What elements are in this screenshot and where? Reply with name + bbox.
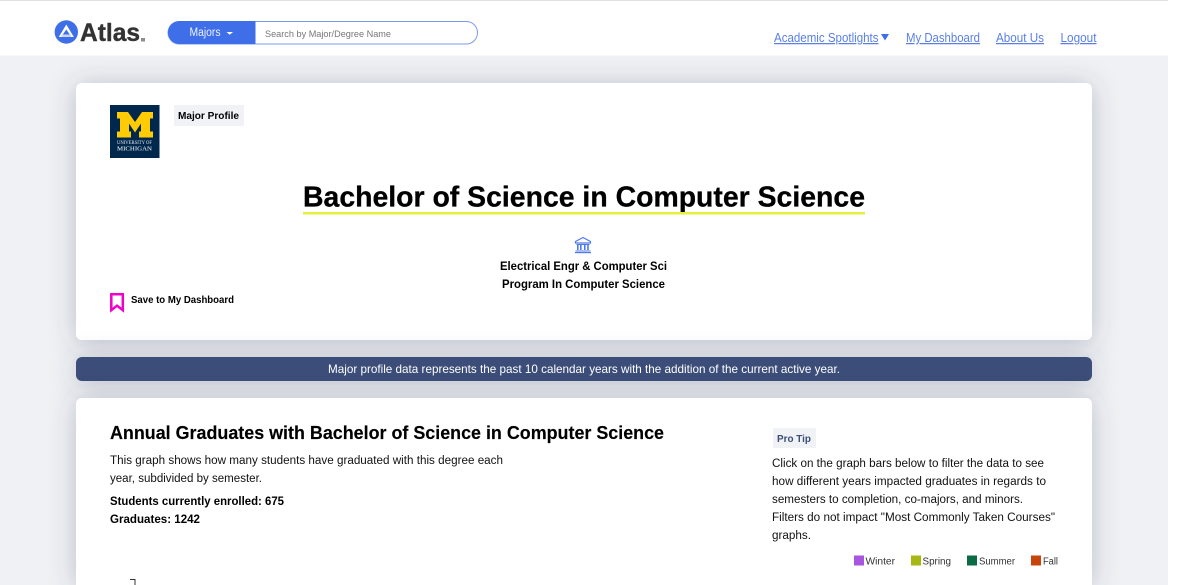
tag: pro tip: Pro Tip: [777, 434, 811, 445]
text: pro tip body: how different years impacted graduates in regards to: [772, 476, 1046, 488]
icon: institution building: [575, 238, 591, 253]
legend: Summer: [979, 556, 1016, 568]
search bar: Majors: [190, 27, 221, 39]
icon: University of Michigan logo: UNIVERSITY OF: [117, 141, 152, 146]
icon: University of Michigan logo: [110, 105, 160, 158]
tag: pro tip: [773, 428, 816, 448]
legend: Spring: [922, 556, 951, 568]
text: pro tip body: graphs.: [772, 530, 811, 542]
heading: Annual Graduates with Bachelor of Science in Computer Science: [110, 422, 664, 443]
text: enrolment statistics: Graduates: 1242: [110, 514, 200, 526]
banner: data note: Major profile data represents the past 10 calendar years with the addition of the current active year.: [328, 362, 840, 376]
text: pro tip body: [772, 458, 1055, 542]
panel: annual graduates card: [76, 398, 1092, 585]
navigation links: My Dashboard: [906, 31, 980, 45]
text: graph description: This graph shows how many students have graduated with this degree each: [110, 455, 503, 467]
navigation links: Logout: [1060, 31, 1097, 45]
banner: data note: [76, 357, 1092, 381]
text: graph description: [110, 455, 503, 485]
navigation bar: [0, 0, 1168, 56]
tag: major profile: [174, 105, 244, 126]
text: department and program: Program In Computer Science: [502, 279, 665, 291]
legend: Fall: [1043, 556, 1058, 568]
navigation links: About Us: [996, 31, 1044, 45]
save to dashboard: Save to My Dashboard: [131, 295, 234, 306]
text: pro tip body: Filters do not impact "Most Commonly Taken Courses": [772, 512, 1055, 524]
text: graph description: year, subdivided by semester.: [110, 473, 262, 485]
chart corner: [130, 580, 135, 585]
navigation links: Academic Spotlights: [774, 31, 878, 45]
navigation links: [774, 31, 1097, 45]
legend: [854, 556, 1058, 568]
search bar: [168, 21, 478, 44]
search bar: Search by Major/Degree Name: [265, 29, 391, 40]
legend: Winter: [866, 556, 896, 568]
wordmark: Atlas: [80, 19, 140, 47]
text: department and program: [500, 261, 667, 291]
text: pro tip body: Click on the graph bars below to filter the data to see: [772, 458, 1044, 470]
tag: major profile: Major Profile: [178, 110, 239, 122]
title: Bachelor of Science in Computer Science: [303, 182, 865, 214]
save to dashboard: [111, 294, 234, 310]
panel: major profile card: [76, 83, 1092, 340]
text: department and program: Electrical Engr & Computer Sci: [500, 261, 667, 273]
text: enrolment statistics: [110, 496, 284, 523]
icon: Atlas logo: [55, 20, 78, 44]
icon: University of Michigan logo: MICHIGAN: [117, 146, 152, 152]
text: pro tip body: semesters to completion, co-majors, and minors.: [772, 494, 1023, 506]
text: enrolment statistics: Students currently enrolled: 675: [110, 496, 285, 508]
